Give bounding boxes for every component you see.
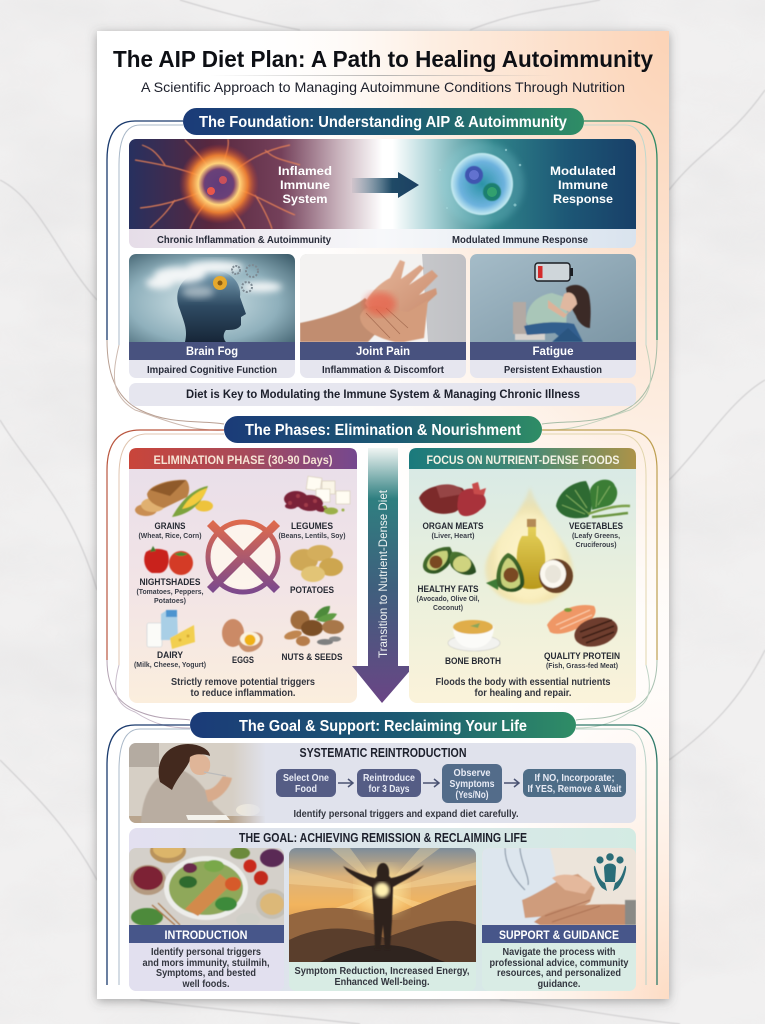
arrow <box>338 779 353 787</box>
note: nutrients: Floods the body with essential nutrients <box>436 676 611 688</box>
note: Identify personal triggers and expand diet carefully. <box>294 808 519 820</box>
section frames <box>107 121 657 985</box>
arrow <box>504 779 519 787</box>
item: dairy <box>134 610 206 669</box>
photo: food bowls <box>130 848 284 925</box>
label: modulated immune response: Immune <box>558 178 608 192</box>
label: inflamed immune system: System <box>282 192 328 206</box>
label: modulated immune response <box>550 164 616 206</box>
flow step 2: for 3 Days <box>368 784 410 795</box>
card: support and guidance <box>482 848 636 991</box>
item: healthy fats <box>416 547 480 612</box>
section heading: foundation <box>183 108 584 135</box>
panel header <box>129 448 357 469</box>
illustration: golden drop with healthy fats <box>485 487 573 604</box>
panel: elimination phase <box>129 448 357 703</box>
caption: chronic inflammation: Chronic Inflammation & Autoimmunity <box>157 234 331 246</box>
item: quality protein: (Fish, Grass-fed Meat) <box>546 661 618 670</box>
flow step 3 <box>442 764 502 803</box>
description: Identify personal triggers <box>151 946 261 958</box>
item: legumes <box>278 476 350 540</box>
item: dairy: DAIRY <box>157 650 184 661</box>
icon: low battery <box>535 263 573 281</box>
card: introduction <box>129 839 288 991</box>
item: dairy: (Milk, Cheese, Yogurt) <box>134 660 206 669</box>
item: organ meats: ORGAN MEATS <box>422 521 484 532</box>
item: bone broth <box>445 620 501 667</box>
section heading: phases <box>224 416 542 443</box>
illustration: hands with sore wrist <box>300 254 438 342</box>
flow step 4: If NO, Incorporate; <box>534 773 614 784</box>
description: well foods. <box>182 978 230 990</box>
label: SUPPORT & GUIDANCE <box>499 928 619 942</box>
item: vegetables <box>556 480 630 549</box>
description: resources, and personalized <box>497 967 621 979</box>
description: professional advice, community <box>490 957 629 969</box>
description: Enhanced Well-being. <box>334 976 430 988</box>
item: bone broth: BONE BROTH <box>445 656 501 667</box>
description <box>294 965 470 988</box>
item: quality protein <box>544 605 621 670</box>
panel: nutrient-dense foods <box>409 448 636 703</box>
item: nuts and seeds: NUTS & SEEDS <box>282 652 342 663</box>
icon: community in caring hands <box>594 853 626 891</box>
illustration: exhausted woman on chair <box>513 285 591 342</box>
item: nightshades: (Tomatoes, Peppers, <box>136 587 204 596</box>
subtitle: A Scientific Approach to Managing Autoimmune Conditions Through Nutrition <box>141 79 625 95</box>
flow step 3: (Yes/No) <box>456 790 488 801</box>
note: elimination: Strictly remove potential triggers <box>171 676 315 688</box>
label: inflamed immune system: Immune <box>280 178 330 192</box>
item: eggs: EGGS <box>232 655 254 666</box>
poster card <box>97 31 669 999</box>
description <box>490 946 629 990</box>
arrow: transition to nutrient-dense diet: Transition to Nutrient-Dense Diet <box>376 489 390 658</box>
item: potatoes <box>290 545 343 596</box>
illustration: head in fog <box>177 270 246 342</box>
description: and mors immunity, stuilmih, <box>142 957 270 969</box>
label: inflamed immune system <box>278 164 332 206</box>
item: grains: (Wheat, Rice, Corn) <box>138 531 202 540</box>
item: quality protein: QUALITY PROTEIN <box>544 651 620 662</box>
description: Navigate the process with <box>502 946 616 958</box>
caption: Inflammation & Discomfort <box>322 364 444 376</box>
note: nutrients <box>436 676 611 699</box>
section heading: goal and support: The Goal & Support: Reclaiming Your Life <box>239 718 527 735</box>
panel: brain fog <box>129 254 295 378</box>
label: brain fog: Brain Fog <box>186 344 238 358</box>
item: healthy fats: Coconut) <box>433 603 463 612</box>
flow step 1: Food <box>295 784 317 795</box>
label: inflamed immune system: Inflamed <box>278 164 332 178</box>
photo: caring hands and doctor <box>482 848 636 925</box>
panel header: ELIMINATION PHASE (30-90 Days) <box>154 453 332 467</box>
icon: arrow from inflamed to modulated <box>352 172 419 198</box>
item: vegetables: (Leafy Greens, <box>572 531 620 540</box>
callout: diet is key: Diet is Key to Modulating the Immune System & Managing Chronic Illness <box>186 387 580 401</box>
arrow: transition to nutrient-dense diet <box>352 448 414 703</box>
note: elimination <box>171 676 315 699</box>
item: nightshades: Potatoes) <box>154 596 186 605</box>
item: grains: GRAINS <box>154 521 186 532</box>
section heading: goal and support <box>190 712 576 738</box>
panel: immune system banner <box>129 139 636 248</box>
item: potatoes: POTATOES <box>290 585 334 596</box>
title: The AIP Diet Plan: A Path to Healing Autoimmunity <box>113 46 653 72</box>
illustration: inflamed immune cell <box>135 139 300 229</box>
description <box>142 946 270 990</box>
flow step 3: Symptoms <box>450 779 495 790</box>
panel: joint pain <box>300 254 466 378</box>
panel header: FOCUS ON NUTRIENT-DENSE FOODS <box>426 453 620 467</box>
illustration: modulated immune cell <box>439 142 524 226</box>
label: joint pain: Joint Pain <box>356 344 410 358</box>
flow step 1: Select One <box>283 773 329 784</box>
panel: fatigue <box>470 254 636 378</box>
note: elimination: to reduce inflammation. <box>190 687 296 699</box>
label: modulated immune response: Response <box>553 192 613 206</box>
label: modulated immune response: Modulated <box>550 164 616 178</box>
caption: Impaired Cognitive Function <box>147 364 277 376</box>
item: nightshades: NIGHTSHADES <box>140 577 200 588</box>
description: Symptoms, and bested <box>156 967 256 979</box>
panel: systematic reintroduction <box>129 743 636 823</box>
item: organ meats <box>419 482 486 540</box>
description: guidance. <box>538 978 581 990</box>
item: vegetables: VEGETABLES <box>569 521 623 532</box>
item: organ meats: (Liver, Heart) <box>432 531 475 540</box>
note: nutrients: for healing and repair. <box>474 687 572 699</box>
section heading: foundation: The Foundation: Understanding AIP & Autoimmunity <box>199 114 567 131</box>
flow step 2 <box>357 769 421 797</box>
item: vegetables: Cruciferous) <box>576 540 617 549</box>
panel: the goal <box>129 828 636 991</box>
photo: woman journaling <box>129 743 266 823</box>
item: nuts and seeds <box>282 606 344 663</box>
callout: diet is key <box>129 383 636 406</box>
heading: SYSTEMATIC REINTRODUCTION <box>300 746 466 760</box>
label: fatigue: Fatigue <box>532 344 574 358</box>
panel header <box>409 448 636 469</box>
item: legumes: LEGUMES <box>291 521 333 532</box>
item: grains <box>135 480 213 540</box>
item: healthy fats: (Avocado, Olive Oil, <box>416 594 480 603</box>
flow step 3: Observe <box>454 768 491 779</box>
item: healthy fats: HEALTHY FATS <box>418 584 478 595</box>
card: symptom reduction <box>289 848 476 991</box>
description: Symptom Reduction, Increased Energy, <box>294 965 470 977</box>
flow step 4: If YES, Remove & Wait <box>528 784 622 795</box>
caption: modulated response: Modulated Immune Response <box>452 234 588 246</box>
flow step 2: Reintroduce <box>363 773 415 784</box>
icon: crossed-out circle <box>208 522 278 592</box>
heading: THE GOAL: ACHIEVING REMISSION & RECLAIMING LIFE <box>239 831 527 845</box>
caption: Persistent Exhaustion <box>504 364 602 376</box>
flow step 1 <box>276 769 336 797</box>
item: nightshades <box>136 546 204 605</box>
arrow <box>423 779 439 787</box>
item: eggs <box>222 619 263 666</box>
section heading: phases: The Phases: Elimination & Nourishment <box>245 422 522 439</box>
label: INTRODUCTION <box>164 928 248 942</box>
item: legumes: (Beans, Lentils, Soy) <box>278 531 346 540</box>
flow step 4 <box>523 769 626 797</box>
photo: person at sunrise on summit <box>289 848 476 962</box>
